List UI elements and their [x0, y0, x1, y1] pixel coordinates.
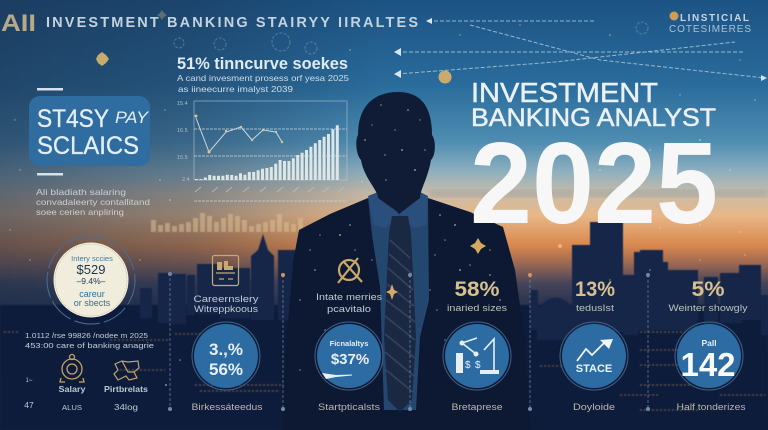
top heading: INVESTMENT BANKING STAIRYY IIRALTES	[46, 15, 418, 31]
headline: INVESTMENT	[471, 77, 658, 108]
bar and line chart: 15.5	[177, 155, 188, 161]
panel: pay scale badge: ST4SY	[37, 105, 109, 133]
left text block	[36, 187, 150, 217]
stat: 58%	[447, 278, 508, 313]
icon labels, lower left: 47	[24, 400, 34, 410]
left text block: Ali bladiath salaring	[36, 187, 126, 197]
callout: salary circle: careur	[79, 289, 105, 299]
circle: 142: 142	[680, 346, 736, 383]
circle: growth chart icon: $	[465, 360, 471, 371]
panel: pay scale badge: PAY	[115, 108, 150, 127]
label: intake: Intate merries	[316, 292, 383, 302]
label: career: Careernslery	[194, 294, 259, 304]
arrow heads	[394, 18, 767, 81]
bottom labels	[192, 402, 746, 412]
stat: 13%: tedusIst	[576, 303, 615, 313]
bottom labels: Doyloide	[573, 402, 615, 412]
callout: salary circle: –9.4%–	[77, 276, 106, 286]
label: intake	[316, 292, 383, 314]
circle: financial value	[315, 322, 383, 390]
text block: career note	[25, 331, 154, 350]
top right brand	[669, 12, 751, 35]
icon labels, lower left: Pirtbrelats	[104, 384, 148, 394]
chart heading: A cand invesment prosess orf yesa 2025	[177, 73, 349, 83]
callout: salary circle: or sbects	[74, 298, 111, 308]
top right brand: COTESIMERES	[669, 24, 751, 35]
bottom labels: Bretaprese	[452, 402, 502, 412]
label: intake: pcavitalo	[327, 304, 371, 314]
background: city skyline	[0, 222, 768, 430]
callout: salary circle: Intery sccies	[71, 254, 113, 263]
circle: percentages: 3.,%	[209, 340, 243, 359]
circle: financial value: Ficnalaltys	[330, 339, 368, 348]
panel: pay scale badge: SCLAICS	[37, 132, 139, 160]
bar and line chart: 15.4	[177, 101, 188, 107]
circle: growth chart icon	[443, 322, 511, 390]
stat: 5%: 5%	[692, 278, 725, 301]
circle: 142	[675, 322, 743, 390]
icon: salary medal	[60, 354, 84, 382]
icon: career chart tile	[212, 256, 238, 286]
label: career: Witreppkoous	[194, 304, 259, 314]
left text block: soee cerien anpliring	[36, 207, 124, 217]
icon labels, lower left	[24, 378, 148, 412]
dashed arrows, top right	[397, 21, 765, 78]
icon: tools emblem	[338, 258, 362, 283]
chart heading	[177, 54, 349, 94]
small outline icons in sky	[174, 22, 648, 54]
circle: percentages: 56%	[209, 360, 243, 379]
icon: world map	[114, 361, 139, 380]
icon labels, lower left: Salary	[58, 384, 86, 394]
stat: 5%: Weinter showgly	[668, 303, 748, 313]
silhouette of analyst in a suit	[283, 92, 530, 430]
icon labels, lower left: 34log	[114, 402, 138, 412]
bar and line chart: 2.4	[182, 177, 190, 183]
gold stars	[96, 10, 486, 300]
headline	[471, 77, 716, 132]
faded bars behind the skyline	[151, 213, 303, 232]
chart heading: 51% tinncurve soekes	[177, 54, 348, 73]
top right brand: LINSTICIAL	[680, 13, 749, 24]
stat: 58%: inaried sizes	[447, 303, 508, 313]
bar and line chart	[177, 101, 347, 201]
icon labels, lower left: 1 -	[25, 378, 33, 384]
callout: salary circle	[47, 236, 135, 324]
stat: 13%: 13%	[575, 278, 615, 301]
bottom labels: Startpticalsts	[318, 402, 381, 412]
chart heading: as iineecurre imalyst 2039	[178, 84, 293, 94]
stat: 5%	[668, 278, 748, 313]
background: city lights	[4, 332, 765, 410]
stat: 13%	[575, 278, 615, 313]
circle: stace trend: STACE	[576, 363, 612, 375]
text block: career note: 1.0112 /rse 99826 /nodee m 2025	[25, 331, 148, 340]
label: career	[194, 294, 259, 314]
vertical dotted dividers	[170, 273, 648, 409]
left text block: convadaleerty contallitand	[36, 197, 150, 207]
panel: pay scale badge	[29, 88, 150, 176]
divider end dots	[168, 272, 650, 411]
circle: 142: Pall	[701, 338, 717, 348]
icon labels, lower left: ALUS	[62, 405, 82, 412]
bottom labels: Half tonderizes	[676, 402, 746, 412]
circle: percentages	[192, 322, 260, 390]
top logo mark: AII	[1, 10, 36, 37]
headline: BANKING ANALYST	[471, 104, 716, 132]
stat: 58%: 58%	[454, 278, 500, 301]
bar and line chart: 16.5	[177, 128, 188, 134]
bottom labels: Birkessáteedus	[192, 402, 263, 412]
circle: financial value: $37%	[331, 351, 369, 368]
callout: salary circle: $529	[77, 262, 105, 277]
text block: career note: 453:00 care of banking anagrie	[25, 341, 154, 350]
big year: 2025	[470, 118, 718, 248]
circle: growth chart icon: $	[475, 360, 481, 371]
circle: stace trend	[560, 322, 628, 390]
